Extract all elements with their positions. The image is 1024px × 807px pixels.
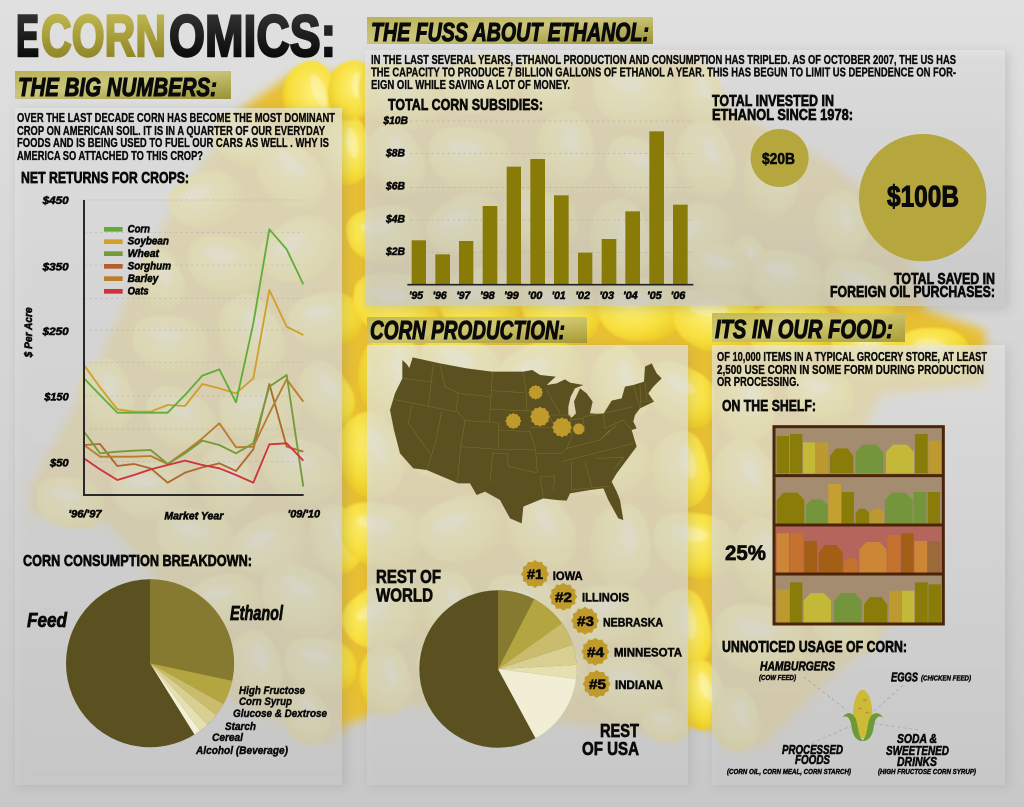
axis labels: $350 [42, 262, 69, 274]
axis labels: $450 [42, 195, 69, 207]
production markers [505, 385, 585, 437]
savings label [830, 271, 995, 301]
year labels: '98 [480, 290, 496, 302]
state ranking: MINNESOTA [614, 646, 682, 660]
title: OMICS: [169, 4, 336, 69]
axis labels [23, 195, 320, 522]
intro text [717, 349, 987, 389]
pie labels: Glucose & Dextrose [233, 708, 327, 720]
year labels: '02 [575, 290, 590, 302]
state ranking [521, 560, 682, 698]
label: processed foods: FOODS [795, 753, 831, 767]
intro text: AMERICA SO ATTACHED TO THIS CROP? [17, 148, 203, 163]
panel: its in our food [712, 345, 1009, 787]
state ranking: #5 [589, 676, 606, 692]
legend: Oats [128, 285, 149, 297]
intro text [371, 52, 956, 92]
investment label: ETHANOL SINCE 1978: [712, 107, 853, 124]
shelf heading: ON THE SHELF: [722, 398, 816, 415]
legend: Barley [128, 273, 159, 285]
heading: the big numbers: THE BIG NUMBERS: [18, 72, 217, 102]
chart heading: NET RETURNS FOR CROPS: [21, 170, 189, 187]
year labels: '04 [623, 290, 638, 302]
label: hamburgers: (COW FEED) [759, 673, 796, 682]
state ranking: #4 [587, 644, 604, 660]
year labels: '03 [599, 290, 614, 302]
year labels [409, 290, 686, 302]
investment label: TOTAL INVESTED IN [712, 93, 834, 110]
label: hamburgers: HAMBURGERS [760, 660, 836, 674]
label: soda and sweetened drinks: DRINKS [897, 755, 938, 769]
savings label: TOTAL SAVED IN [894, 271, 995, 288]
pie labels: Corn Syrup [239, 696, 292, 708]
legend: Wheat [128, 248, 160, 260]
value labels: $2B [385, 246, 405, 258]
axis labels: $150 [43, 392, 69, 404]
year labels: '99 [504, 290, 520, 302]
label: hamburgers [759, 660, 836, 682]
map: United States [390, 357, 662, 523]
percent label: 25% [725, 542, 766, 565]
circle: $20B [751, 129, 809, 187]
panel: corn production [367, 345, 692, 787]
pie heading: CORN CONSUMPTION BREAKDOWN: [23, 553, 252, 570]
label: eggs: (CHICKEN FEED) [921, 674, 971, 682]
pie chart: production share [419, 590, 577, 748]
value labels: $4B [385, 214, 405, 226]
chart heading: TOTAL CORN SUBSIDIES: [388, 97, 543, 114]
label: eggs: EGGS [891, 671, 918, 685]
pie labels: Cereal [212, 732, 244, 744]
heading: the fuss about ethanol: THE FUSS ABOUT ETHANOL: [371, 17, 649, 47]
state ranking: #3 [577, 613, 594, 629]
state ranking: IOWA [553, 569, 583, 583]
pie labels: OF USA [582, 739, 639, 759]
state ranking: INDIANA [615, 678, 663, 692]
second shelf products [777, 484, 940, 523]
pie labels: WORLD [376, 586, 433, 606]
legend: Corn [128, 223, 150, 235]
axis labels: $50 [49, 458, 69, 470]
pie labels [27, 603, 327, 757]
legend: Soybean [128, 236, 169, 248]
panel: ethanol [365, 50, 1009, 310]
pie labels: Alcohol (Beverage) [195, 745, 288, 757]
pie labels: REST OF [376, 567, 441, 587]
year labels: '95 [409, 290, 424, 302]
panel: the big numbers [15, 108, 346, 787]
intro text: CROP ON AMERICAN SOIL. IT IS IN A QUARTER OF OUR EVERYDAY [17, 123, 325, 138]
line chart: net returns for crops [23, 195, 320, 522]
axis labels: Market Year [164, 510, 224, 522]
pie labels: REST [600, 721, 639, 741]
label: processed foods: PROCESSED [782, 743, 843, 757]
intro text [17, 110, 335, 163]
usage heading: UNNOTICED USAGE OF CORN: [722, 639, 907, 656]
pie labels: Ethanol [230, 603, 283, 625]
year labels: '01 [552, 290, 566, 302]
value labels: $10B [382, 115, 408, 127]
diagram: corn uses [803, 677, 918, 743]
state ranking: #1 [527, 566, 543, 582]
year labels: '05 [647, 290, 663, 302]
intro text: OR PROCESSING. [717, 374, 799, 389]
year labels: '06 [671, 290, 686, 302]
year labels: '96 [433, 290, 447, 302]
state ranking: #2 [555, 589, 572, 605]
axis labels: '09/'10 [288, 509, 320, 521]
label: soda and sweetened drinks: SODA & [897, 732, 937, 746]
legend [104, 223, 171, 297]
axis labels: $250 [42, 326, 69, 338]
circle: $20B: $20B [762, 151, 795, 168]
icon: corn cob [843, 690, 883, 741]
intro text: FOODS AND IS BEING USED TO FUEL OUR CARS AS WELL . WHY IS [17, 135, 329, 150]
label: soda and sweetened drinks: SWEETENED [886, 744, 949, 758]
state ranking: NEBRASKA [603, 616, 663, 630]
value labels: $6B [385, 180, 405, 192]
intro text: OVER THE LAST DECADE CORN HAS BECOME THE MOST DOMINANT [17, 110, 335, 125]
bottom shelf products [777, 582, 941, 623]
pie labels: High Fructose [239, 685, 305, 697]
title: E [16, 4, 39, 69]
value labels [382, 115, 408, 258]
label: soda and sweetened drinks [878, 732, 976, 776]
label: processed foods [727, 743, 851, 776]
pie labels: Starch [225, 721, 256, 733]
heading: corn production: CORN PRODUCTION: [370, 315, 565, 345]
label: soda and sweetened drinks: (HIGH FRUCTOSE CORN SYRUP) [878, 767, 976, 776]
pie chart: corn consumption [66, 579, 234, 747]
title [16, 4, 336, 69]
state ranking: ILLINOIS [582, 591, 629, 605]
axis labels: '96/'97 [68, 509, 103, 521]
top shelf products [777, 434, 941, 473]
value labels: $8B [385, 148, 405, 160]
title: CORN [41, 4, 166, 69]
year labels: '97 [456, 290, 471, 302]
legend: Sorghum [128, 260, 171, 272]
bar chart: corn subsidies [382, 115, 693, 302]
shelf illustration [774, 427, 943, 624]
year labels: '00 [528, 290, 542, 302]
label: processed foods: (CORN OIL, CORN MEAL, CORN STARCH) [727, 767, 851, 776]
circle: $100B [859, 134, 986, 261]
third shelf products [777, 533, 940, 573]
circle: $100B: $100B [887, 181, 959, 214]
intro text: EIGN OIL WHILE SAVING A LOT OF MONEY. [371, 77, 570, 92]
pie labels: Feed [27, 610, 68, 632]
axis labels: $ Per Acre [23, 307, 35, 358]
investment label [712, 93, 853, 124]
label: eggs [891, 671, 971, 685]
heading: its in our food: ITS IN OUR FOOD: [715, 314, 893, 344]
pie labels [376, 567, 639, 759]
